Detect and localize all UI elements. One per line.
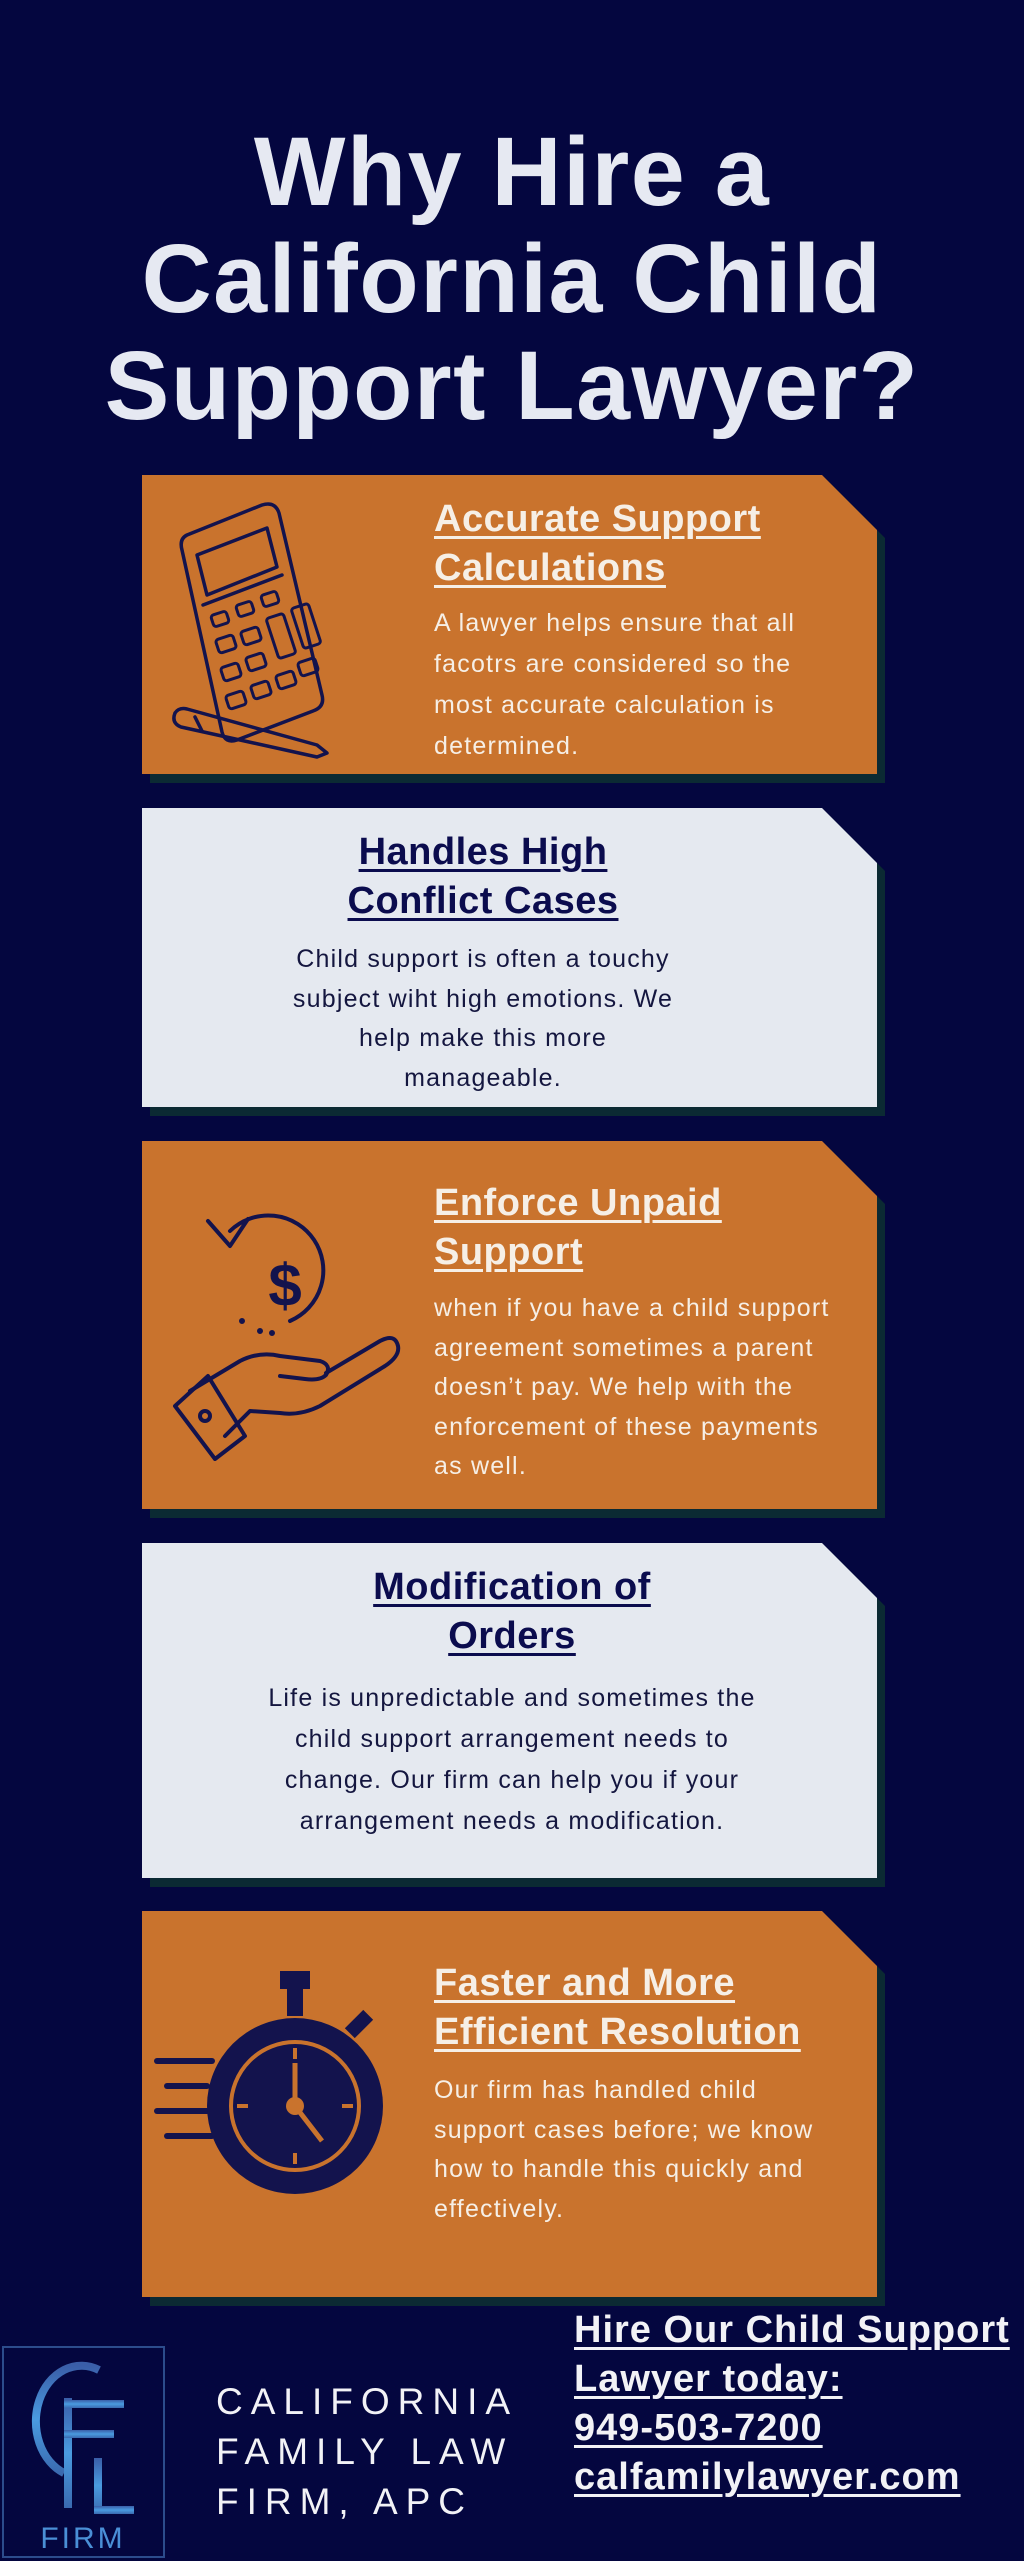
heading: Orders — [448, 1615, 576, 1657]
heading — [434, 498, 761, 589]
body text: how to handle this quickly and — [434, 2155, 804, 2183]
call to action: Hire Our Child Support — [574, 2309, 1010, 2351]
body text: A lawyer helps ensure that all — [434, 609, 795, 637]
heading: Handles High — [359, 831, 607, 873]
body text: determined. — [434, 732, 579, 760]
icon: stopwatch — [154, 1971, 383, 2194]
body text — [268, 1684, 756, 1835]
body text: Life is unpredictable and sometimes the — [268, 1684, 756, 1712]
call to action — [574, 2309, 1010, 2498]
panel: handles high conflict cases — [142, 808, 885, 1116]
body text: most accurate calculation is — [434, 691, 775, 719]
company name: CALIFORNIA — [216, 2381, 518, 2422]
title: Support Lawyer? — [105, 331, 919, 440]
heading — [348, 831, 618, 922]
call to action: Lawyer today: — [574, 2358, 843, 2400]
body text: child support arrangement needs to — [295, 1725, 729, 1753]
heading — [373, 1566, 651, 1657]
heading: Efficient Resolution — [434, 2011, 801, 2053]
body text: subject wiht high emotions. We — [293, 984, 673, 1012]
icon: money in hand: $ — [268, 1252, 302, 1319]
heading: Enforce Unpaid — [434, 1182, 722, 1224]
title — [105, 117, 919, 440]
company name: FIRM, APC — [216, 2481, 473, 2522]
body text: help make this more — [359, 1024, 607, 1052]
body text: doesn’t pay. We help with the — [434, 1373, 793, 1401]
body text: change. Our firm can help you if your — [285, 1766, 739, 1794]
panel: accurate support calculations — [142, 475, 885, 783]
heading — [434, 1962, 801, 2053]
body text: facotrs are considered so the — [434, 650, 791, 678]
heading: Accurate Support — [434, 498, 761, 540]
body text — [434, 1294, 830, 1480]
title: California Child — [142, 224, 882, 333]
company name — [216, 2381, 518, 2522]
heading: Conflict Cases — [348, 880, 618, 922]
body text: Child support is often a touchy — [296, 945, 670, 973]
logo — [2, 2346, 165, 2558]
call to action: calfamilylawyer.com — [574, 2456, 961, 2498]
company name: FAMILY LAW — [216, 2431, 513, 2472]
body text: effectively. — [434, 2194, 564, 2222]
body text — [293, 945, 673, 1092]
body text — [434, 2076, 813, 2222]
icon: money in hand — [172, 1214, 400, 1461]
call to action: 949-503-7200 — [574, 2407, 823, 2449]
heading: Calculations — [434, 547, 666, 589]
heading: Modification of — [373, 1566, 651, 1608]
icon: calculator and pen — [172, 502, 329, 759]
body text: enforcement of these payments — [434, 1412, 819, 1440]
body text: agreement sometimes a parent — [434, 1334, 814, 1362]
heading: Support — [434, 1231, 583, 1273]
body text: when if you have a child support — [434, 1294, 830, 1322]
body text: as well. — [434, 1452, 527, 1480]
body text: Our firm has handled child — [434, 2076, 757, 2104]
logo: FIRM — [40, 2522, 126, 2555]
body text — [434, 609, 795, 760]
heading: Faster and More — [434, 1962, 735, 2004]
panel: enforce unpaid support — [142, 1141, 885, 1518]
body text: support cases before; we know — [434, 2116, 813, 2144]
panel: modification of orders — [142, 1543, 885, 1887]
title: Why Hire a — [254, 117, 770, 226]
body text: arrangement needs a modification. — [300, 1807, 724, 1835]
body text: manageable. — [404, 1064, 562, 1092]
heading — [434, 1182, 722, 1273]
panel: faster resolution — [142, 1911, 885, 2306]
